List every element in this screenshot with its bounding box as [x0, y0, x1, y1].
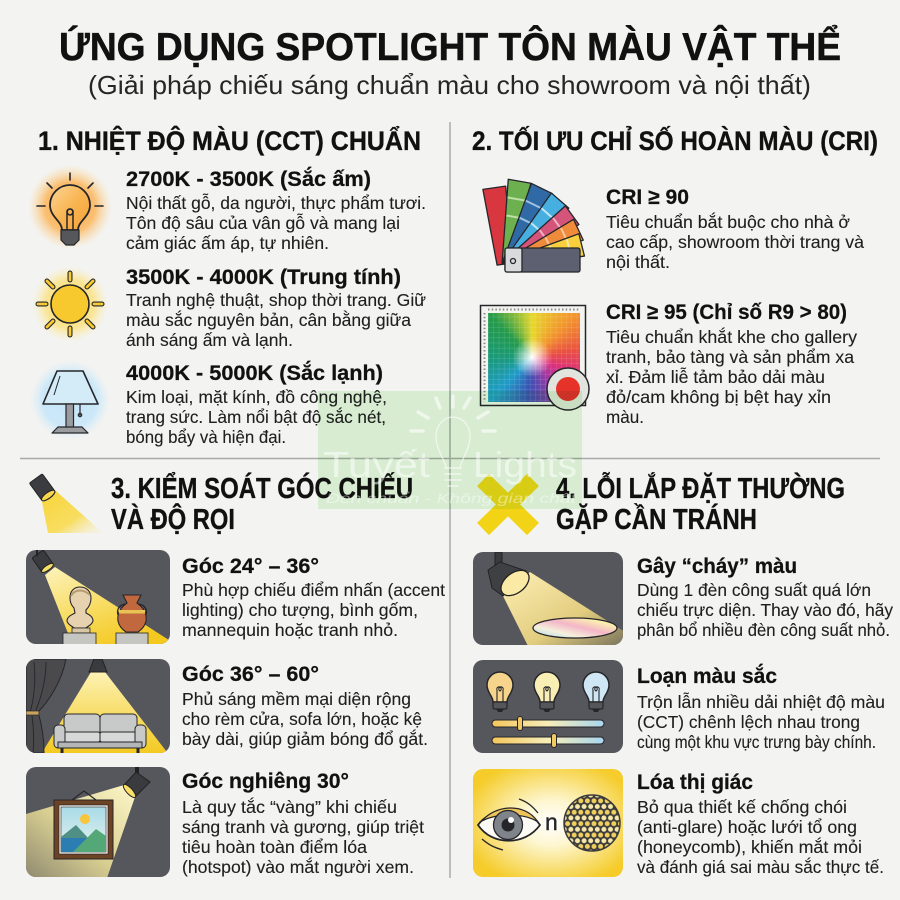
text: angle 24-36: lighting) cho tượng, bình gốm, — [182, 600, 418, 620]
text: CRI 90: nội thất. — [606, 252, 670, 272]
text: CRI 95: Tiêu chuẩn khắt khe cho gallery — [606, 326, 857, 347]
text: warm range: cảm giác ấm áp, tự nhiên. — [126, 233, 329, 253]
text: mixed colours: Loạn màu sắc — [637, 663, 777, 688]
text: tilt 30: tiêu hoàn toàn điểm lóa — [182, 837, 367, 857]
text: angle 36-60: bày dài, giúp giảm bóng đổ gắt. — [182, 728, 428, 749]
text: tilt 30: (hotspot) vào mắt người xem. — [182, 856, 414, 877]
panel: 4 installation mistakes — [473, 471, 893, 877]
heading: section 3: 3. KIỂM SOÁT GÓC CHIẾU — [111, 471, 413, 505]
watermark: Tuyết Lights: Lights — [473, 444, 577, 485]
text: CRI 95: xỉ. Đảm liễ tảm bảo dải màu — [606, 366, 825, 387]
watermark: Tuyết Lights: Tuyết — [323, 444, 430, 485]
text: tilt 30: Góc nghiêng 30° — [182, 769, 349, 793]
illustration: colour burn spotlight — [473, 552, 625, 646]
icon: colour chart with red sample — [480, 306, 589, 410]
text: glare: (anti-glare) hoặc lưới tổ ong — [637, 817, 857, 837]
text: angle 36-60: Phủ sáng mềm mại diện rộng — [182, 689, 411, 709]
text: angle 36-60 — [182, 662, 428, 749]
heading: section 3 — [111, 471, 413, 536]
icon: spotlight with beam — [29, 474, 103, 533]
text: mixed colours — [637, 663, 885, 752]
text: colour burn: Dùng 1 đèn công suất quá lớn — [637, 580, 871, 600]
text: neutral range: ánh sáng ấm và lạnh. — [126, 330, 293, 350]
illustration: glare eye and honeycomb — [473, 769, 623, 877]
text: cool range: Kim loại, mặt kính, đồ công nghệ, — [126, 387, 387, 407]
text: cool range: trang sức. Làm nổi bật độ sắc nét, — [126, 406, 386, 427]
text: CRI 95: CRI ≥ 95 (Chỉ số R9 > 80) — [606, 300, 847, 324]
panel: 1 CCT — [28, 125, 426, 447]
text: mixed colours: Trộn lẫn nhiều dải nhiệt độ màu — [637, 691, 885, 712]
text: angle 24-36: mannequin hoặc tranh nhỏ. — [182, 620, 398, 640]
text: CRI 90: Tiêu chuẩn bắt buộc cho nhà ở — [606, 211, 850, 232]
text: angle 24-36 — [182, 554, 445, 640]
text: glare: Bỏ qua thiết kế chống chói — [637, 797, 847, 817]
panel: 2 CRI — [472, 124, 878, 427]
watermark: Tuyết Lights: Đèn chuẩn - Không gian chất — [326, 490, 578, 506]
text: cool range: bóng bẩy và hiện đại. — [126, 427, 286, 447]
heading: section 3: VÀ ĐỘ RỌI — [111, 502, 235, 536]
text: glare: (honeycomb), khiến mắt mỏi — [637, 836, 862, 857]
icon: cool table lamp — [30, 360, 110, 440]
subtitle: (Giải pháp chiếu sáng chuẩn màu cho showroom và nội thất) — [88, 70, 811, 100]
illustration: mixed CCT bulbs and sliders — [473, 660, 623, 753]
icon: yellow cross — [483, 480, 533, 529]
text: CRI 95: tranh, bảo tàng và sản phẩm xa — [606, 347, 854, 367]
text: CRI 95: đỏ/cam không bị bệt hay xỉn — [606, 387, 831, 407]
text: CRI 95: màu. — [606, 407, 644, 427]
text: CRI 95 — [606, 300, 857, 427]
icon: colour swatch fan — [483, 179, 584, 275]
heading: section 4 — [556, 471, 845, 536]
illustration: wide beam on sofa and curtain — [26, 659, 170, 756]
text: warm range — [126, 166, 426, 253]
text: angle 24-36: Phù hợp chiếu điểm nhấn (accent — [182, 580, 445, 600]
text: warm range: Nội thất gỗ, da người, thực phẩm tươi. — [126, 192, 426, 213]
icon: neutral sun — [32, 266, 108, 342]
text: tilt 30: Là quy tắc “vàng” khi chiếu — [182, 796, 397, 817]
text: glare — [637, 770, 884, 877]
heading: section 4: GẶP CẦN TRÁNH — [556, 502, 757, 536]
text: colour burn: phân bổ nhiều đèn công suất nhỏ. — [637, 620, 890, 640]
watermark: Tuyết Lights — [318, 391, 582, 509]
text: warm range: Tôn độ sâu của vân gỗ và mang lại — [126, 212, 400, 233]
text: CRI 90 — [606, 185, 864, 272]
text: angle 36-60: cho rèm cửa, sofa lớn, hoặc kệ — [182, 709, 422, 729]
text: CRI 90: cao cấp, showroom thời trang và — [606, 232, 864, 252]
text: neutral range — [126, 265, 426, 350]
panel: 3 beam angle — [26, 471, 445, 878]
text: colour burn — [637, 554, 893, 640]
heading: section 4: 4. LỖI LẮP ĐẶT THƯỜNG — [556, 471, 845, 505]
text: tilt 30: sáng tranh và gương, giúp triệt — [182, 817, 424, 837]
text: warm range: 2700K - 3500K (Sắc ấm) — [126, 166, 371, 191]
text: cool range: 4000K - 5000K (Sắc lạnh) — [126, 360, 383, 385]
text: glare: Lóa thị giác — [637, 770, 753, 794]
text: angle 24-36: Góc 24° – 36° — [182, 554, 319, 578]
heading: section 1: 1. NHIỆT ĐỘ MÀU (CCT) CHUẨN — [38, 125, 421, 156]
text: neutral range: Tranh nghệ thuật, shop thời trang. Giữ — [126, 290, 426, 310]
text: neutral range: 3500K - 4000K (Trung tính) — [126, 265, 401, 289]
text: colour burn: Gây “cháy” màu — [637, 554, 797, 578]
title: ỨNG DỤNG SPOTLIGHT TÔN MÀU VẬT THỂ — [59, 24, 841, 69]
icon: warm light bulb — [28, 165, 112, 249]
text: angle 36-60: Góc 36° – 60° — [182, 662, 319, 686]
text: colour burn: chiếu trực diện. Thay vào đó, hãy — [637, 600, 893, 620]
illustration: accent beam on bust and vase — [26, 550, 172, 646]
text: CRI 90: CRI ≥ 90 — [606, 185, 689, 209]
illustration: tilted spot on framed painting — [26, 767, 170, 878]
text: glare: và đánh giá sai màu sắc thực tế. — [637, 856, 884, 877]
text: tilt 30 — [182, 769, 424, 877]
text: neutral range: màu sắc nguyên bản, cân bằng giữa — [126, 309, 411, 330]
illustration: glare eye and honeycomb: n — [545, 809, 558, 835]
text: cool range — [126, 360, 387, 447]
text: mixed colours: (CCT) chênh lệch nhau trong — [637, 712, 860, 732]
